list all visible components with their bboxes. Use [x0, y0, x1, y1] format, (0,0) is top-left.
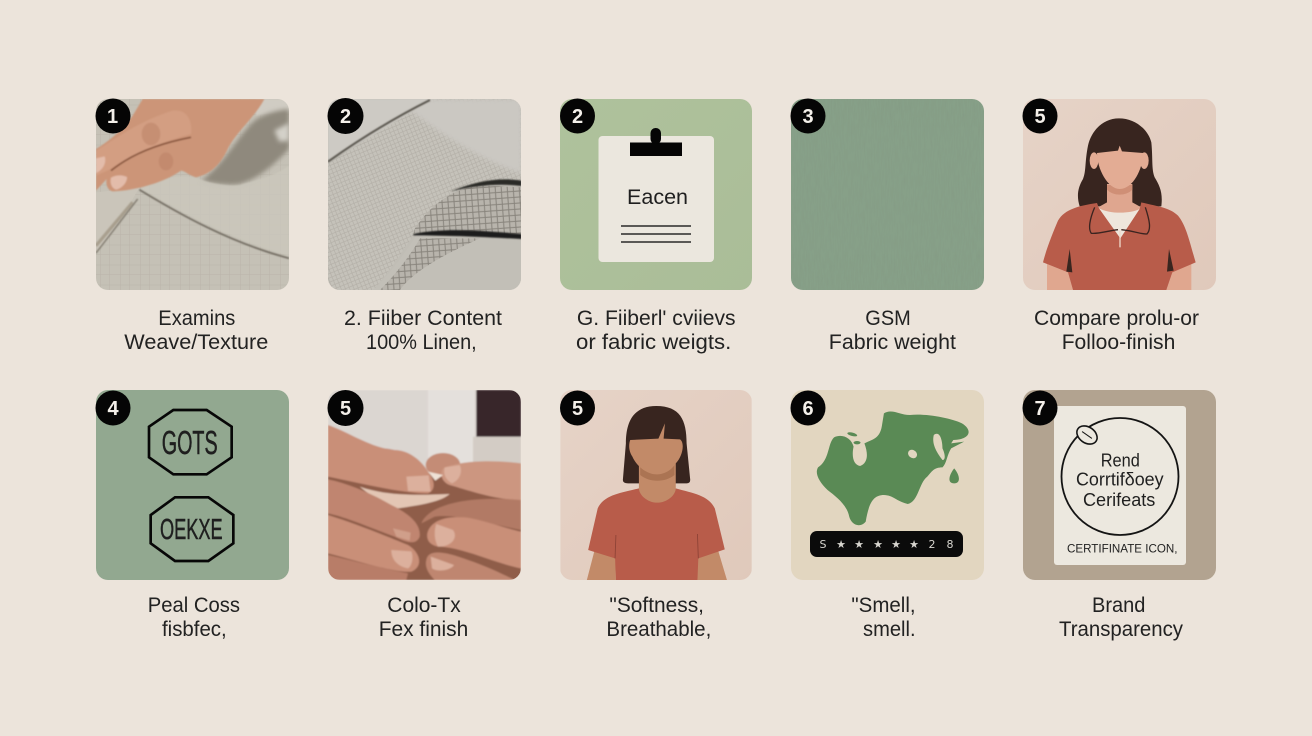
panel: softness and breathability: [560, 390, 752, 641]
rating bar with stars: [810, 531, 963, 557]
caption: [1034, 307, 1199, 354]
number badge 2: 2: [572, 106, 583, 128]
leaf icon: [1073, 422, 1101, 448]
caption: [344, 307, 502, 354]
caption: Transparency: [1059, 618, 1183, 641]
panel: clipboard fibers: [560, 98, 752, 354]
panel: fiber content: [328, 98, 522, 354]
panel: compare finish: [1022, 98, 1216, 354]
green card: [96, 390, 289, 580]
panel: certification seals: [96, 390, 289, 641]
caption: G. Fiiberl' cviievs: [577, 307, 736, 330]
rating bar with stars: ★: [836, 538, 846, 551]
caption: [1059, 594, 1183, 641]
number badge 5: 5: [340, 398, 351, 420]
number badge 6: 6: [802, 398, 814, 420]
green linen swatch: [791, 99, 984, 290]
caption: smell.: [863, 618, 916, 641]
caption: Fabric weight: [829, 331, 956, 354]
photo: fingers pinching fabric: [328, 390, 521, 580]
caption: Compare prolu-or: [1034, 307, 1199, 330]
rating bar with stars: ★: [873, 538, 883, 551]
caption: Weave/Texture: [124, 331, 268, 354]
caption: "Smell,: [851, 594, 916, 617]
certificate text: Corrtifδoey: [1076, 470, 1164, 490]
number badge 5: [328, 390, 364, 426]
illustration: woman in red t-shirt: [560, 390, 752, 580]
seal: GOTS: GOTS: [162, 424, 218, 461]
caption: [606, 594, 711, 641]
number badge 7: [1022, 390, 1058, 426]
panel: examine weave and texture: [96, 98, 289, 354]
caption: [148, 594, 240, 641]
map illustration: [791, 390, 984, 580]
panel: colour fix finish: [328, 390, 521, 641]
rating bar with stars: ★: [854, 538, 864, 551]
caption: fisbfec,: [162, 618, 227, 641]
caption: Peal Coss: [148, 594, 240, 617]
number badge 2: [328, 98, 364, 134]
number badge 1: 1: [107, 106, 118, 128]
clipboard word: Eacen: [627, 186, 688, 209]
panel: GSM fabric weight: [790, 98, 984, 354]
number badge 5: [1022, 98, 1058, 134]
rating bar with stars: 2: [928, 538, 936, 551]
caption: Brand: [1092, 594, 1145, 617]
rating bar with stars: 8: [946, 538, 954, 551]
number badge 4: 4: [107, 398, 119, 420]
number badge 5: 5: [1034, 106, 1046, 128]
number badge 1: [96, 98, 130, 134]
clipboard clip: [630, 128, 682, 156]
green card with clipboard: [560, 99, 752, 290]
number badge 2: 2: [340, 106, 351, 128]
caption: Examins: [158, 307, 235, 330]
panel: smell and origin: [790, 390, 984, 641]
rating bar with stars: ★: [909, 538, 919, 551]
seal: OEKXE: OEKXE: [160, 514, 223, 546]
caption: [851, 594, 916, 641]
caption: Folloo-finish: [1062, 331, 1175, 354]
certificate text: CERTIFINATE ICON,: [1067, 542, 1178, 556]
number badge 6: [790, 390, 826, 426]
caption: [124, 307, 268, 354]
caption: Fex finish: [379, 618, 468, 641]
number badge 5: [560, 390, 595, 426]
caption: or fabric weigts.: [576, 331, 731, 354]
caption: GSM: [865, 307, 911, 330]
number badge 3: [790, 98, 826, 134]
rating bar with stars: ★: [891, 538, 901, 551]
caption: Colo-Tx: [387, 594, 461, 617]
certificate text: Cerifeats: [1083, 490, 1155, 510]
number badge 7: 7: [1034, 398, 1046, 420]
taupe card: [1023, 390, 1216, 580]
certificate text: Rend: [1101, 451, 1140, 471]
rating bar with stars: S: [820, 538, 827, 551]
number badge 5: 5: [572, 398, 583, 420]
caption: [379, 594, 468, 641]
certificate sheet: [1054, 406, 1186, 565]
caption: 100% Linen,: [366, 331, 477, 354]
panel: brand transparency: [1022, 390, 1216, 641]
number badge 2: [560, 98, 595, 134]
photo: hand on linen: [96, 99, 289, 290]
number badge 3: 3: [802, 106, 814, 128]
caption: "Softness,: [609, 594, 704, 617]
caption: [576, 307, 736, 354]
caption: 2. Fiiber Content: [344, 307, 502, 330]
seal: GOTS: [149, 410, 232, 474]
clipboard sheet: [598, 136, 714, 262]
seal: OEKXE: [151, 497, 233, 561]
caption: Breathable,: [606, 618, 711, 641]
photo: woven fabric folds: [328, 99, 522, 290]
certificate text: [1067, 451, 1178, 556]
illustration: woman in collared shirt: [1023, 99, 1216, 290]
number badge 4: [96, 390, 130, 426]
caption: [829, 307, 956, 354]
